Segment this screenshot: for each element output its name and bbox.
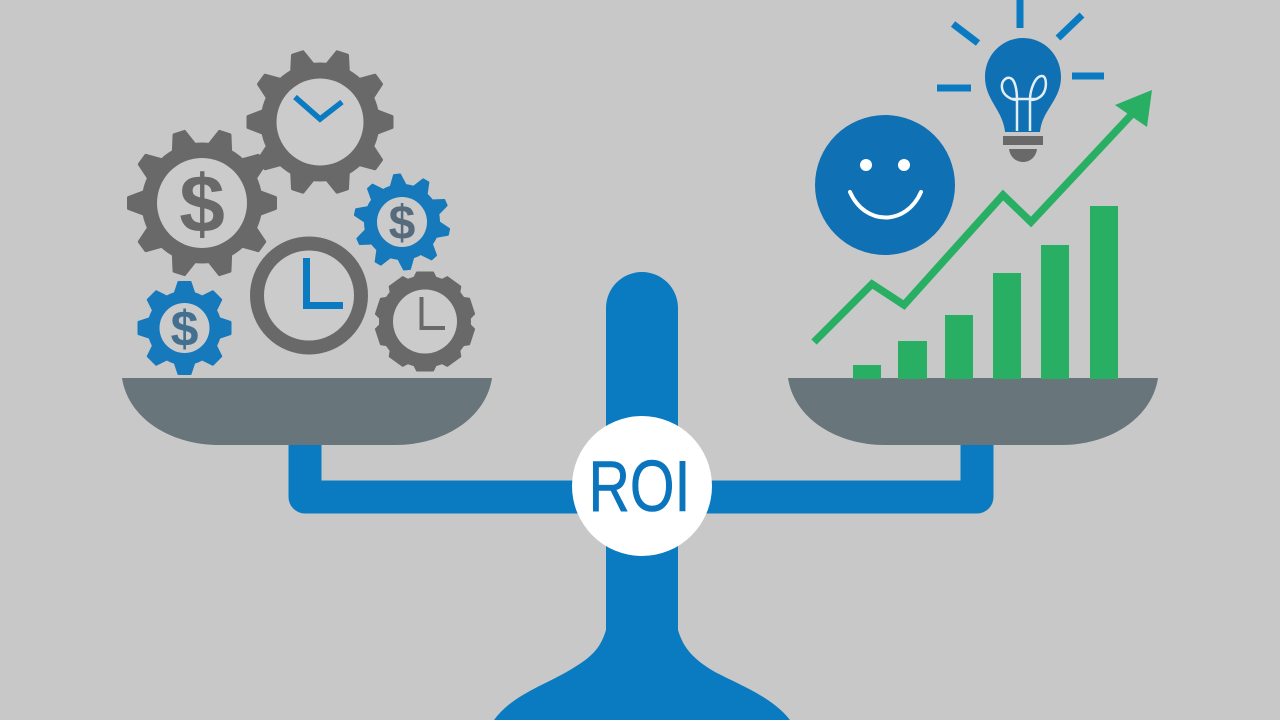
blue gear with dollar, upper right: $: [389, 197, 416, 250]
gear with dollar, large: $: [179, 159, 225, 250]
scale beam and arms: [305, 440, 977, 497]
right pan: [788, 378, 1158, 445]
growth arrow: [814, 90, 1152, 342]
ROI badge: [572, 416, 712, 556]
left pan: [122, 378, 492, 445]
light bulb with rays: [937, 0, 1104, 162]
blue gear with dollar, lower left: [138, 282, 230, 374]
smiley face: [815, 115, 955, 255]
blue gear with dollar, upper right: [354, 174, 450, 270]
blue gear with dollar, lower left: $: [171, 301, 199, 357]
gear with clock, top: [248, 50, 392, 194]
scale post and base: [494, 272, 790, 720]
gear with clock, lower right: [375, 272, 475, 370]
clock: [257, 244, 361, 348]
bar chart: [853, 206, 1118, 379]
ROI badge: ROI: [588, 447, 690, 527]
gear with dollar, large: [128, 129, 276, 277]
